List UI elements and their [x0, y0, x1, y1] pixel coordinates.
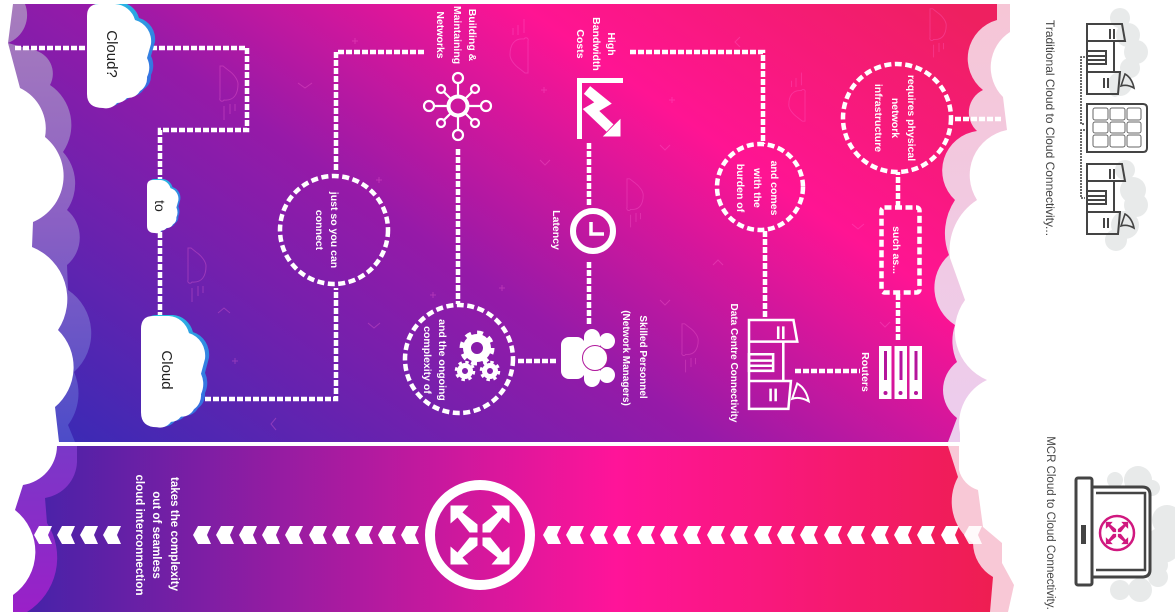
icon: latency clock	[573, 211, 613, 251]
label: High Bandwidth Costs: Bandwidth	[590, 17, 602, 71]
icon: bandwidth chart	[577, 78, 623, 139]
label: MCR Cloud to Cloud Connectivity: MCR Cloud to Cloud Connectivity.	[1044, 436, 1056, 610]
circle: and comes with the burden of: and comes	[768, 161, 780, 216]
cloud: Cloud?	[87, 2, 155, 108]
connector: Cloud? to small cloud	[15, 48, 247, 182]
label: takes the complexity: takes the complexity	[168, 477, 181, 592]
circle: requires physical network infrastructure: requires physical	[905, 75, 917, 161]
connector: routers to such as	[896, 292, 900, 340]
label: High Bandwidth Costs	[574, 17, 617, 71]
connector: data centre to routers	[795, 369, 860, 373]
cloud: to	[147, 179, 180, 233]
circle: just so you can connect	[280, 176, 388, 284]
icon: traditional connectivity diagram	[1081, 8, 1148, 251]
icon: expand logo circle	[430, 485, 530, 585]
circle: requires physical network infrastructure: infrastructure	[872, 84, 884, 152]
label: Skilled Personnel: Skilled Personnel	[637, 315, 648, 399]
cloud: Cloud	[141, 315, 209, 428]
circle: requires physical network infrastructure: network	[889, 98, 901, 138]
circle: and comes with the burden of: burden of	[734, 164, 746, 213]
right cloud border, upper	[934, 4, 1015, 442]
connector: bandwidth to burden circle	[630, 52, 763, 144]
circle: and the ongoing complexity of	[405, 305, 513, 413]
label: takes the complexity	[133, 474, 181, 596]
label: High Bandwidth Costs: High	[605, 32, 617, 56]
circle: and the ongoing complexity of: and the ongoing	[436, 319, 448, 401]
chevrons: left of circle	[193, 526, 419, 544]
label: High Bandwidth Costs: Costs	[574, 29, 586, 59]
label: Routers: Routers	[859, 352, 871, 392]
label: Building & Maintaining Networks	[434, 6, 478, 64]
circle: just so you can connect: connect	[313, 210, 325, 251]
icon: routers	[879, 346, 922, 399]
connector: small cloud to Cloud	[158, 232, 162, 320]
box: such as	[882, 208, 920, 292]
connector: personnel to latency	[587, 260, 591, 324]
circle: and comes with the burden of: with the	[751, 167, 763, 208]
connector: Cloud to circle	[197, 288, 336, 399]
circle: and the ongoing complexity of: complexity of	[421, 326, 433, 394]
circle: and comes with the burden of	[717, 144, 803, 230]
label: Skilled Personnel	[620, 310, 648, 406]
chevrons: left of text	[34, 526, 121, 544]
label: takes the complexity: cloud interconnection	[133, 474, 146, 596]
connector: infrastructure circle to right edge	[955, 117, 1003, 121]
panel: traditional connectivity band	[0, 4, 1015, 442]
connector: such as to infrastructure circle	[896, 172, 900, 207]
icon: network hub	[424, 73, 491, 140]
decorative faint icons	[188, 9, 946, 430]
icon: grey clouds behind traditional diagram	[1105, 8, 1148, 251]
connector: latency to bandwidth	[587, 141, 591, 205]
icon: gears	[456, 332, 499, 380]
chevrons: right of circle	[543, 526, 982, 544]
connector: circle to Building networks	[336, 52, 425, 170]
top page margin	[0, 0, 1175, 4]
icon: data centre	[749, 320, 809, 409]
connector: network icon to complexity circle	[456, 149, 460, 304]
label: Latency: Latency	[550, 210, 562, 250]
label: Building & Maintaining Networks: Maintaining	[451, 6, 463, 64]
panel: MCR connectivity band	[0, 446, 1015, 612]
label: Building & Maintaining Networks: Networks	[434, 11, 446, 59]
icon: MCR device	[1076, 466, 1175, 602]
left cloud border, lower	[0, 446, 77, 612]
left cloud border, upper	[0, 4, 91, 442]
box: such as: such as...	[890, 226, 902, 274]
cloud: Cloud: Cloud	[158, 350, 175, 390]
icon: skilled personnel	[561, 329, 615, 387]
right cloud border, lower	[948, 446, 1015, 612]
cloud: to: to	[152, 200, 168, 212]
connector: complexity circle to personnel	[518, 359, 558, 363]
label: Building & Maintaining Networks: Building &	[466, 9, 478, 62]
cloud: Cloud?: Cloud?	[103, 30, 120, 78]
label: takes the complexity: out of seamless	[150, 491, 163, 579]
band divider	[58, 442, 948, 446]
circle: just so you can connect: just so you can	[328, 191, 340, 268]
connector: burden circle to data centre	[763, 231, 767, 318]
label: Data Centre Connectivity: Data Centre Connectivity	[728, 304, 739, 423]
label: Skilled Personnel: (Network Managers)	[620, 310, 631, 406]
label: Traditional Cloud to Cloud Connectivity: Traditional Cloud to Cloud Connectivity...	[1043, 20, 1057, 236]
circle: requires physical network infrastructure	[843, 64, 951, 172]
